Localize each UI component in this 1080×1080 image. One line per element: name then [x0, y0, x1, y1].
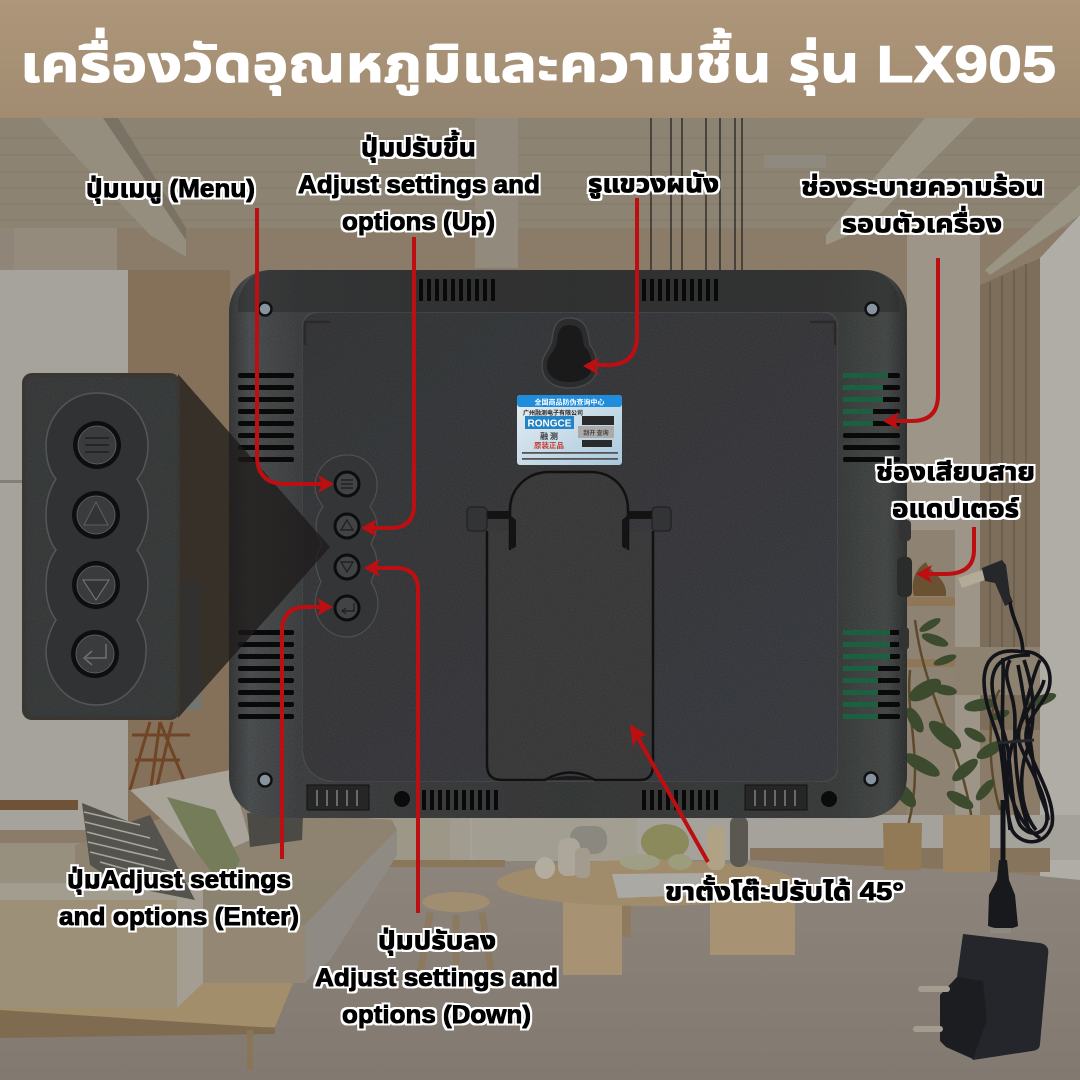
coffee table and decor [497, 816, 797, 975]
back sofa [380, 815, 637, 867]
product sticker: 刮开 查询 [583, 428, 609, 437]
lamp shade [955, 647, 1040, 695]
device back panel [229, 270, 912, 818]
label: adapter port: อแดปเตอร์ [892, 495, 1019, 523]
label: down button [315, 927, 558, 1029]
arrow: wall hole [583, 198, 637, 375]
device body [229, 270, 907, 818]
label: heat vents: รอบตัวเครื่อง [842, 206, 1002, 238]
zoom callout cone [178, 374, 330, 718]
title band: เครื่องวัดอุณหภูมิและความชื้น รุ่น LX905 [20, 28, 1056, 96]
label: heat vents: ช่องระบายความร้อน [801, 173, 1044, 201]
vents [238, 279, 900, 810]
label: enter button: ปุ่มAdjust settings [67, 866, 291, 895]
label: down button: Adjust settings and [315, 964, 558, 992]
left wall and rooms [0, 228, 14, 298]
back wall strip and floor [300, 815, 1080, 860]
plants and pots [883, 616, 1058, 872]
arrow: menu [257, 208, 334, 493]
bottom latches [307, 785, 807, 810]
right wall and curtains [907, 228, 980, 848]
label: up button [298, 130, 540, 236]
label: up button: Adjust settings and [298, 171, 540, 199]
zoomed button panel inset [22, 373, 180, 720]
green tint in right vents [843, 373, 890, 719]
product sticker [517, 395, 622, 465]
product sticker: 广州融测电子有限公司 [523, 408, 583, 417]
arrow: enter [282, 598, 333, 859]
recessed rear panel [302, 312, 838, 782]
button cluster on device [315, 455, 378, 637]
inset button: up [72, 491, 120, 539]
bottom holes [394, 791, 837, 807]
label: adapter port: ช่องเสียบสาย [876, 458, 1035, 486]
usb boot [988, 860, 1018, 929]
arrow: stand [630, 724, 708, 862]
arrow: up [361, 237, 414, 537]
product sticker: 融 测 [540, 431, 558, 442]
label: down button: options (Down) [342, 1001, 531, 1029]
sofa [0, 770, 397, 1070]
title band [0, 0, 1080, 118]
cable strap [998, 740, 1034, 743]
inset button: menu [73, 421, 121, 469]
product sticker: RONGCE [528, 418, 572, 430]
panel corner marks [305, 322, 835, 345]
label: down button: ปุ่มปรับลง [378, 927, 496, 956]
label: up button: options (Up) [342, 208, 495, 236]
screws [258, 302, 878, 786]
label: wall mount hole: รูแขวงผนัง [588, 170, 719, 199]
arrow: down [364, 559, 418, 913]
label: enter button: and options (Enter) [59, 903, 299, 931]
barrel connector [958, 570, 985, 588]
power jack on right edge [897, 557, 912, 597]
label: table stand: ขาตั้งโต๊ะปรับได้ 45° [665, 875, 904, 906]
ceiling planks [0, 118, 1080, 275]
wall-mount keyhole [542, 318, 597, 388]
plug pins [913, 986, 950, 1032]
adapter body [950, 934, 1048, 1060]
inset button: down [72, 561, 120, 609]
top edge shade [238, 270, 900, 312]
label: menu button: ปุ่มเมนู (Menu) [86, 175, 255, 204]
shelves [907, 597, 955, 606]
fold-out table stand [467, 472, 671, 780]
stool [418, 892, 494, 988]
label: up button: ปุ่มปรับขึ้น [361, 130, 476, 163]
inset button: enter [71, 630, 119, 678]
folding chairs [130, 722, 190, 795]
label: enter button [59, 866, 299, 931]
label: adapter port [876, 458, 1035, 523]
label: heat vents [801, 173, 1044, 238]
coiled cable [984, 602, 1053, 880]
product sticker: 原装正品 [534, 440, 564, 451]
adapter plug and cable [913, 560, 1053, 1060]
product sticker: 全国商品防伪查询中心 [534, 398, 604, 408]
arrow: heat vents [883, 258, 938, 430]
hanging lamp wires [651, 118, 742, 272]
pillows [82, 770, 303, 900]
arrow: adapter port [916, 527, 974, 583]
